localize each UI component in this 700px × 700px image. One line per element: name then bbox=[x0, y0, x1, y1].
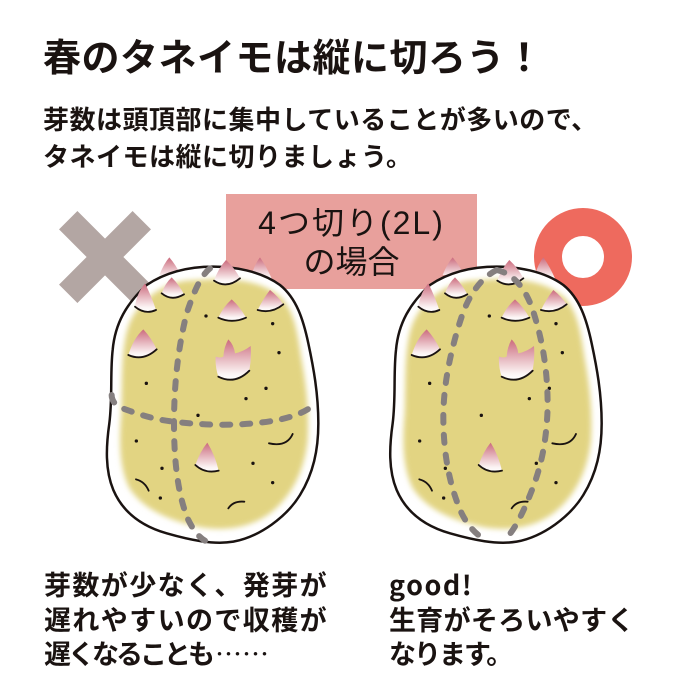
icon: circle mark bbox=[548, 222, 618, 292]
caption: good result: 生育がそろいやすく bbox=[389, 598, 635, 638]
caption: bad result: 芽数が少なく、発芽が bbox=[44, 564, 328, 603]
intro text: 芽数は頭頂部に集中していることが多いので、 bbox=[43, 100, 598, 137]
caption: bad result: 遅くなることも…… bbox=[44, 633, 269, 672]
label: four-cut 2L bbox=[258, 205, 445, 283]
caption: good result: なります。 bbox=[389, 633, 511, 672]
caption: good result bbox=[389, 564, 635, 672]
intro text: タネイモは縦に切りましょう。 bbox=[43, 137, 412, 174]
caption: bad result: 遅れやすいので収穫が bbox=[44, 598, 328, 638]
pink label background bbox=[226, 194, 477, 289]
potato: quartered lengthwise bbox=[390, 257, 602, 543]
caption: good result: good! bbox=[389, 564, 473, 603]
intro text bbox=[43, 100, 598, 174]
icon: cross mark bbox=[31, 183, 179, 331]
caption: bad result bbox=[44, 564, 328, 672]
label: four-cut 2L: の場合 bbox=[303, 237, 400, 283]
potato: quartered crosswise bbox=[107, 257, 318, 543]
label: four-cut 2L: 4つ切り(2L) bbox=[258, 205, 445, 241]
title: 春のタネイモは縦に切ろう！ bbox=[43, 27, 544, 82]
